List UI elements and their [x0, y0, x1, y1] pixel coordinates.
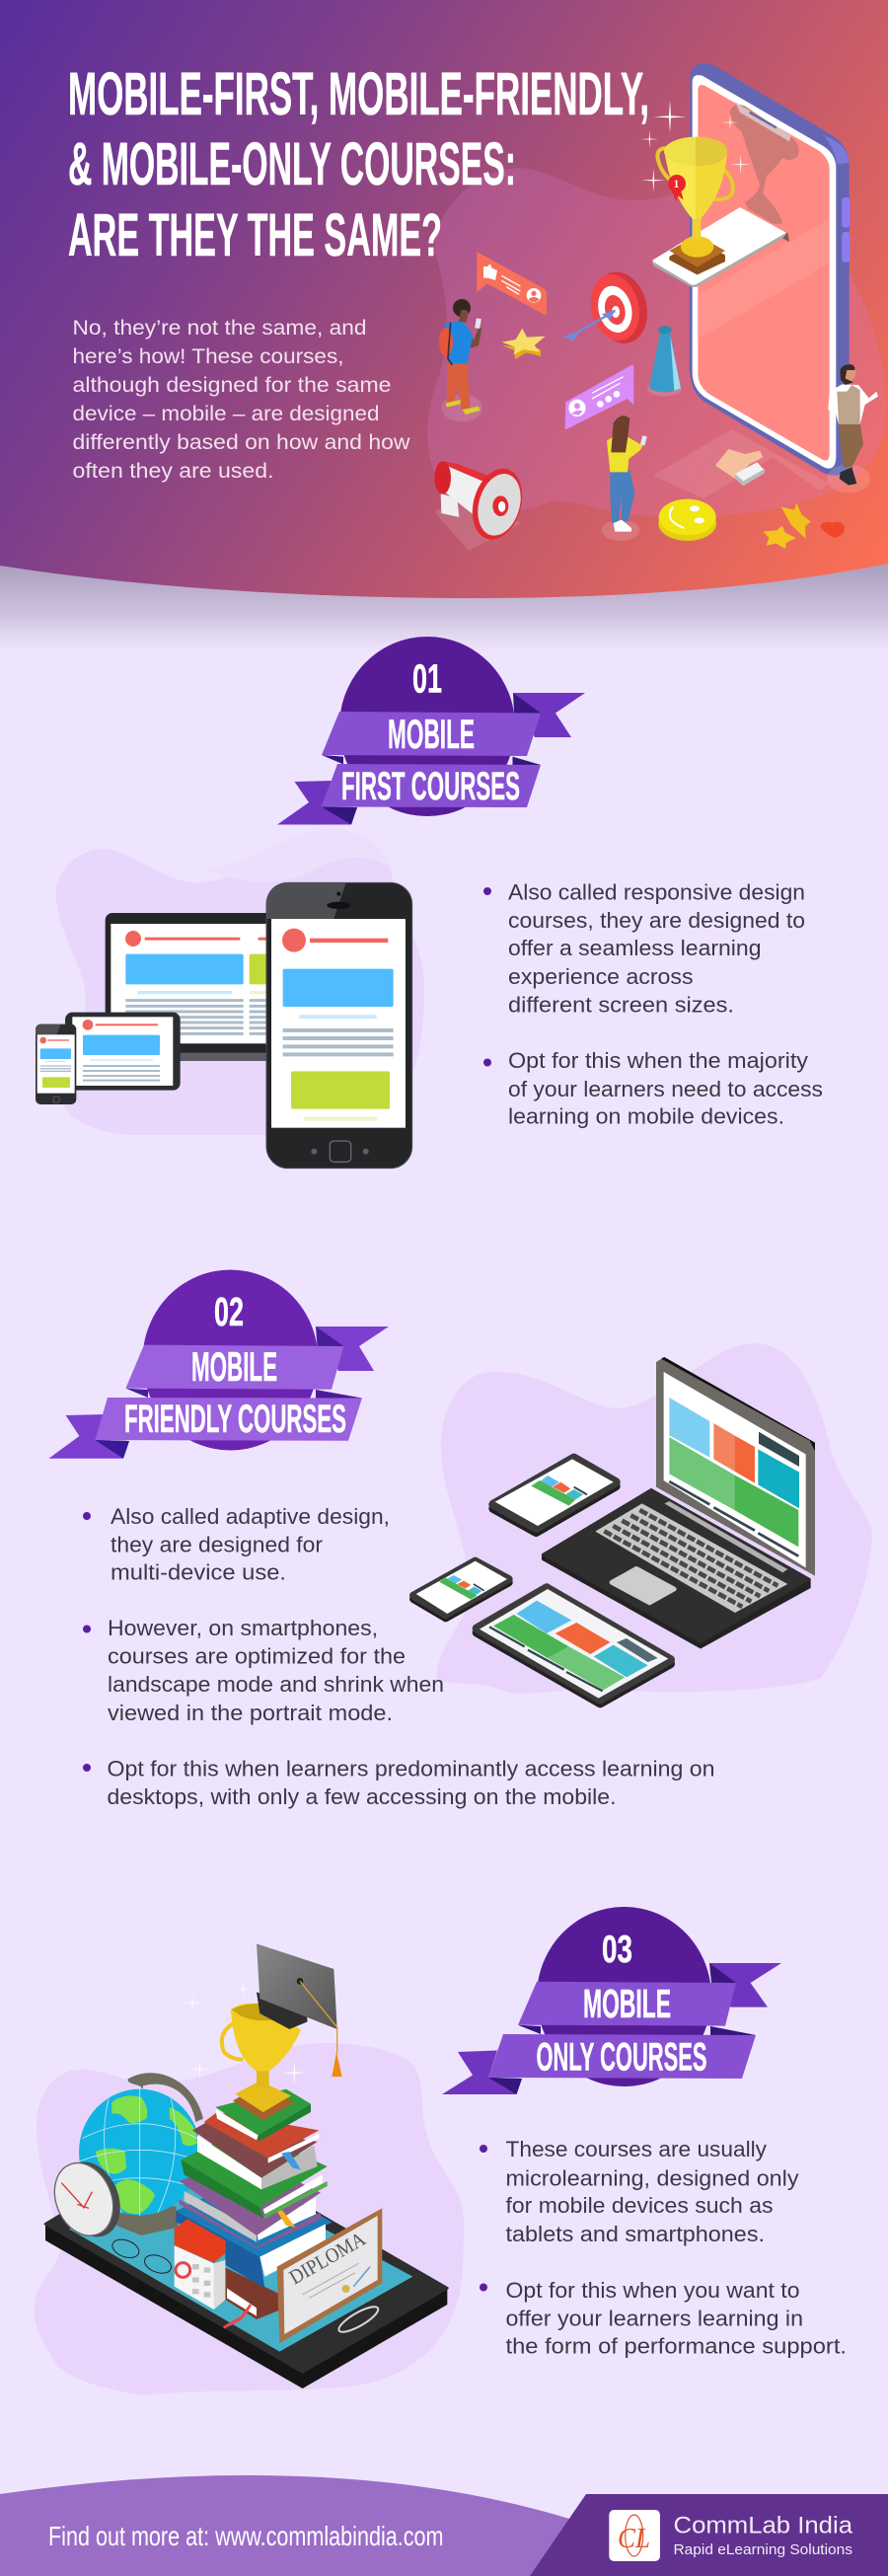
footer logo panel: CL	[618, 2523, 650, 2554]
glasses	[110, 2236, 174, 2277]
bullets: mobile friendly: desktops, with only a few accessing on the mobile.	[107, 1784, 616, 1809]
person with backpack	[439, 299, 482, 421]
badge 01: mobile first courses: 01	[412, 655, 442, 701]
icon: stars and heart	[763, 502, 845, 549]
bullets: mobile first: offer a seamless learning	[508, 936, 762, 960]
badge 03: mobile only courses: ONLY COURSES	[537, 2035, 706, 2079]
bullets: mobile first: Opt for this when the majority	[508, 1048, 809, 1073]
intro text	[73, 316, 410, 483]
bullets: mobile only: for mobile devices such as	[505, 2193, 774, 2218]
footer logo panel: Rapid eLearning Solutions	[673, 2541, 852, 2558]
badge 02: mobile friendly courses: MOBILE	[191, 1343, 277, 1390]
big phone	[266, 882, 412, 1169]
small phone	[413, 1561, 509, 1618]
badge 01: mobile first courses	[277, 637, 585, 825]
icon: thumbs up	[653, 429, 829, 498]
icon: like speech bubble	[477, 252, 547, 316]
icon: target with arrow	[562, 266, 654, 349]
footer logo panel	[530, 2494, 888, 2576]
bullets: mobile only: offer your learners learning in	[505, 2306, 803, 2331]
footer band: Find out more at: www.commlabindia.com	[48, 2521, 444, 2551]
phone	[493, 1458, 616, 1532]
badge 02: mobile friendly courses	[48, 1269, 389, 1459]
bullets: mobile only: microlearning, designed only	[505, 2165, 799, 2191]
globe	[79, 2073, 203, 2235]
bullets: mobile friendly: Opt for this when learners predominantly access learning on	[107, 1757, 714, 1780]
title: & MOBILE-ONLY COURSES:	[68, 130, 516, 197]
bullets: mobile friendly: courses are optimized for the	[108, 1644, 406, 1668]
calendar	[175, 2219, 225, 2310]
bullets: mobile friendly: they are designed for	[111, 1532, 324, 1557]
icon: reviews speech bubble	[565, 365, 633, 429]
phone base	[45, 2139, 447, 2388]
illustration: laptop, tablets and phones	[413, 1343, 872, 1704]
badge 03: mobile only courses	[442, 1907, 781, 2094]
intro text: device – mobile – are designed	[73, 402, 379, 425]
bullets: mobile first: Also called responsive design	[508, 880, 805, 904]
icon: smiley coin	[658, 499, 716, 541]
intro text: often they are used.	[73, 459, 274, 483]
badge 01: mobile first courses: MOBILE	[388, 711, 475, 757]
trophy	[184, 1980, 307, 2120]
intro text: differently based on how and how	[73, 430, 410, 454]
bullets: mobile only	[480, 2137, 847, 2359]
bullets: mobile first: different screen sizes.	[508, 993, 734, 1017]
person: man with vest	[827, 364, 878, 493]
icon: megaphone	[434, 461, 530, 551]
laptop	[106, 913, 273, 1061]
title	[68, 60, 649, 268]
bullets: mobile friendly: However, on smartphones,	[108, 1616, 378, 1640]
tablet	[477, 1588, 670, 1704]
title: ARE THEY THE SAME?	[68, 201, 442, 268]
badge 01: mobile first courses: FIRST COURSES	[341, 765, 520, 808]
badge 03: mobile only courses: MOBILE	[583, 1981, 671, 2026]
person: woman with phone	[602, 416, 647, 541]
bullets: mobile friendly: Also called adaptive design,	[111, 1504, 390, 1529]
tablet	[65, 1013, 181, 1091]
intro text: although designed for the same	[73, 373, 391, 397]
bullets: mobile first	[483, 880, 823, 1129]
panel: header background	[0, 0, 888, 598]
badge 02: mobile friendly courses: FRIENDLY COURSES	[124, 1398, 346, 1441]
bullets: mobile friendly: viewed in the portrait mode.	[108, 1701, 393, 1725]
illustration: phone with education items	[35, 1943, 464, 2395]
bullets: mobile first: learning on mobile devices.	[508, 1103, 784, 1129]
small phone	[36, 1024, 76, 1104]
illustration: phone with trophy: 1	[674, 179, 680, 190]
graduation cap	[257, 1943, 342, 2077]
illustration: responsive devices	[36, 829, 424, 1169]
icon: cone bottle	[647, 326, 682, 396]
diploma	[277, 2208, 382, 2343]
bullets: mobile first: of your learners need to access	[508, 1077, 823, 1101]
book stack	[176, 2089, 333, 2327]
clock	[44, 2153, 131, 2245]
bullets: mobile first: experience across	[508, 964, 693, 989]
footer band	[0, 2475, 582, 2576]
bullets: mobile only: Opt for this when you want to	[505, 2278, 799, 2303]
bullets: mobile first: courses, they are designed to	[508, 908, 805, 933]
icon: star	[502, 329, 546, 359]
intro text: here’s how! These courses,	[73, 344, 343, 368]
bullets: mobile only: tablets and smartphones.	[505, 2222, 765, 2246]
badge 03: mobile only courses: 03	[602, 1929, 632, 1971]
bullets: mobile only: the form of performance support.	[505, 2333, 847, 2359]
intro text: No, they’re not the same, and	[73, 316, 367, 340]
diploma: DIPLOMA	[286, 2229, 370, 2289]
illustration: phone with trophy	[640, 63, 850, 476]
bullets: mobile friendly: landscape mode and shrink when	[108, 1672, 444, 1697]
badge 02: mobile friendly courses: 02	[214, 1289, 244, 1334]
bullets: mobile only: These courses are usually	[505, 2137, 768, 2161]
laptop	[543, 1357, 815, 1647]
bullets: mobile friendly	[83, 1504, 714, 1809]
footer logo panel: CommLab India	[673, 2513, 853, 2539]
bullets: mobile friendly: multi-device use.	[111, 1559, 286, 1585]
header shadow	[0, 563, 888, 651]
